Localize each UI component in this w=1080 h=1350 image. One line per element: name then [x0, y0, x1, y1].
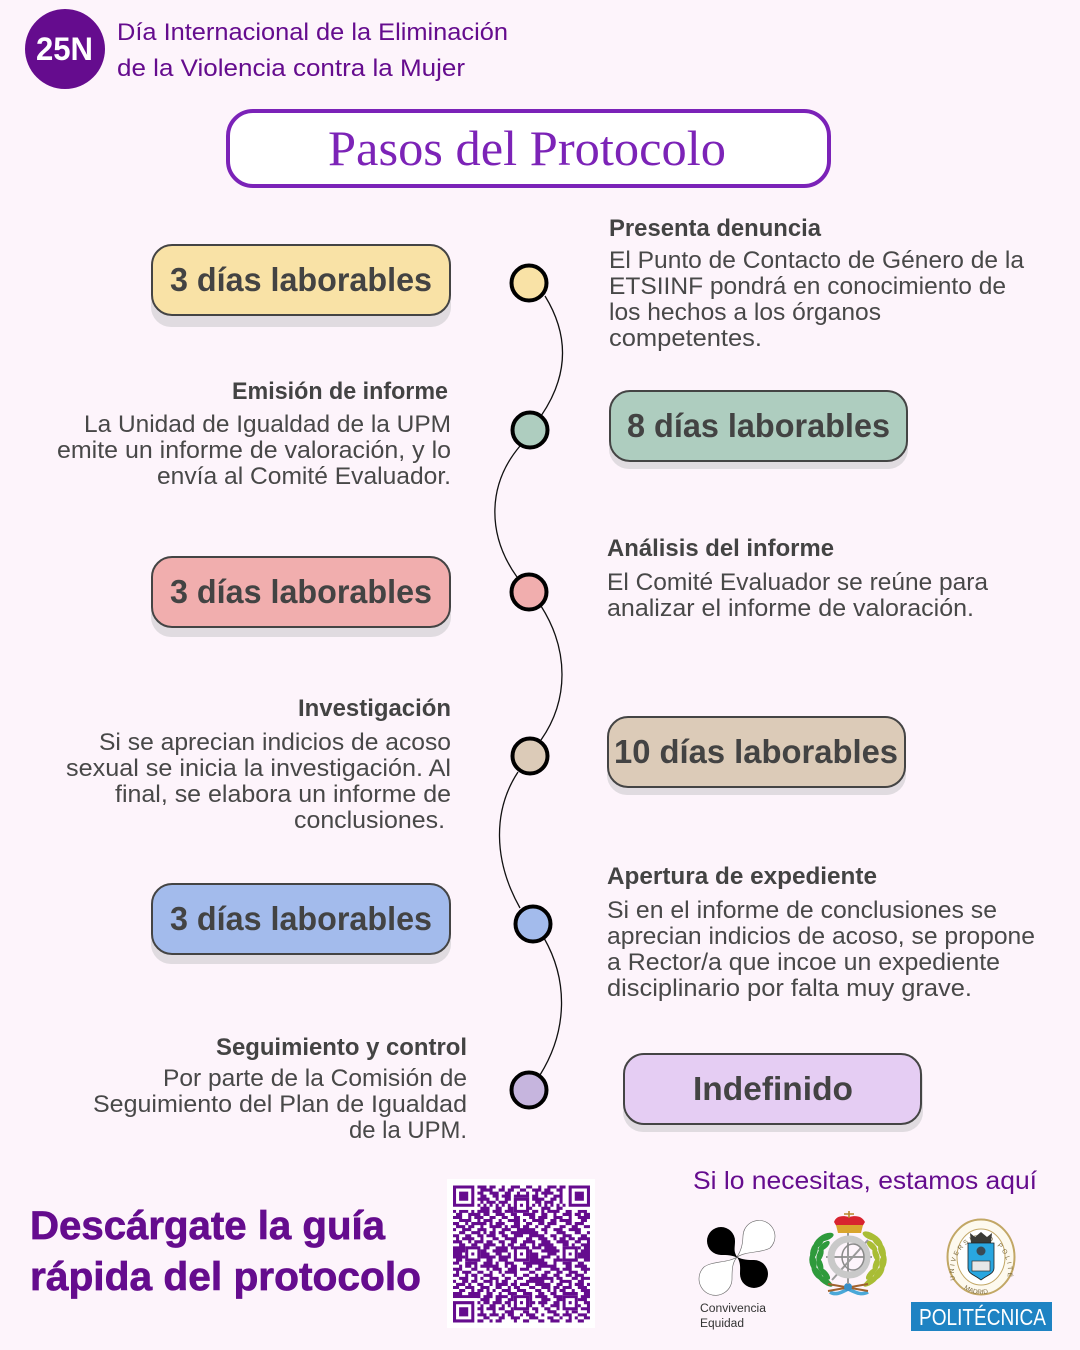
step: Apertura de expediente	[607, 863, 1035, 1002]
badge: 25N	[25, 9, 105, 89]
step: Apertura de expediente: Si en el informe de conclusiones se	[607, 897, 997, 924]
pill: 3 días laborables (blue): 3 días laborables	[170, 900, 432, 937]
timeline connector curves	[495, 296, 563, 1075]
logo: ETSIINF crest	[808, 1211, 888, 1294]
logo: Universidad Politécnica de Madrid seal: UNIVERSIDAD POLITÉCNICA	[950, 1235, 1014, 1280]
step: Análisis del informe	[607, 535, 989, 622]
header text: de la Violencia contra la Mujer	[117, 55, 465, 82]
step: Presenta denuncia: ETSIINF pondrá en conocimiento de	[609, 273, 1006, 300]
logo: Convivencia Equidad: Equidad	[700, 1318, 744, 1330]
QR code	[447, 1179, 595, 1328]
step: Apertura de expediente: a Rector/a que incoe un expediente	[607, 949, 1000, 976]
pill: 10 días laborables (beige): 10 días laborables	[614, 733, 898, 770]
logo: Convivencia Equidad	[699, 1220, 775, 1330]
step: Presenta denuncia: Presenta denuncia	[609, 215, 822, 242]
pill: 8 días laborables (green): 8 días laborables	[627, 407, 890, 444]
call to action: download guide: rápida del protocolo	[30, 1255, 421, 1299]
support message: Si lo necesitas, estamos aquí	[693, 1167, 1037, 1195]
title box	[228, 111, 829, 186]
step: Seguimiento y control: Seguimiento del Plan de Igualdad	[93, 1091, 467, 1118]
step: Presenta denuncia: El Punto de Contacto de Género de la	[609, 247, 1025, 274]
badge: 25N: 25N	[36, 31, 93, 67]
pill: 3 días laborables (red): 3 días laborables	[170, 573, 432, 610]
pill: 8 días laborables (green)	[609, 391, 908, 469]
step: Emisión de informe: La Unidad de Igualdad de la UPM	[84, 411, 451, 438]
step: Investigación: conclusiones.	[294, 807, 445, 834]
header text	[117, 19, 508, 82]
step: Emisión de informe: Emisión de informe	[232, 378, 448, 405]
header text: Día Internacional de la Eliminación	[117, 19, 508, 46]
step: Apertura de expediente: Apertura de expediente	[607, 863, 877, 890]
pill: 3 días laborables (red)	[151, 557, 451, 637]
pill: 3 días laborables (yellow)	[151, 245, 451, 327]
step: Investigación: sexual se inicia la investigación. Al	[66, 755, 451, 782]
step: Apertura de expediente: aprecian indicios de acoso, se propone	[607, 923, 1035, 950]
logo: Universidad Politécnica de Madrid seal: MADRID	[964, 1285, 988, 1294]
step: Emisión de informe	[57, 378, 451, 490]
timeline nodes	[512, 266, 550, 1108]
pill: 3 días laborables (blue)	[151, 884, 451, 964]
logo: POLITÉCNICA banner: POLITÉCNICA	[919, 1304, 1047, 1330]
pill: 10 días laborables (beige)	[607, 717, 906, 795]
call to action: download guide	[30, 1204, 421, 1299]
step: Análisis del informe: El Comité Evaluador se reúne para	[607, 569, 989, 596]
step: Emisión de informe: emite un informe de valoración, y lo	[57, 437, 451, 464]
header: 25N badge and day title	[25, 9, 508, 89]
step: Seguimiento y control: Por parte de la Comisión de	[163, 1065, 467, 1092]
step: Investigación: Investigación	[298, 695, 451, 722]
title box: Pasos del Protocolo	[328, 120, 726, 176]
step: Presenta denuncia	[609, 215, 1025, 352]
step: Seguimiento y control: de la UPM.	[349, 1117, 467, 1144]
logo: Convivencia Equidad: Convivencia	[700, 1303, 767, 1315]
step: Investigación: Si se aprecian indicios de acoso	[99, 729, 451, 756]
step: Presenta denuncia: competentes.	[609, 325, 762, 352]
step: Presenta denuncia: los hechos a los órganos	[609, 299, 881, 326]
step: Investigación	[66, 695, 451, 834]
pill: Indefinido (lilac)	[623, 1054, 923, 1132]
step: Seguimiento y control	[93, 1034, 467, 1144]
step: Análisis del informe: analizar el informe de valoración.	[607, 595, 974, 622]
step: Emisión de informe: envía al Comité Evaluador.	[157, 463, 451, 490]
pill: 3 días laborables (yellow): 3 días laborables	[170, 261, 432, 298]
step: Seguimiento y control: Seguimiento y control	[216, 1034, 467, 1061]
call to action: download guide: Descárgate la guía	[30, 1204, 386, 1248]
step: Investigación: final, se elabora un informe de	[115, 781, 451, 808]
step: Apertura de expediente: disciplinario por falta muy grave.	[607, 975, 972, 1002]
pill: Indefinido (lilac): Indefinido	[693, 1070, 853, 1107]
step: Análisis del informe: Análisis del informe	[607, 535, 834, 562]
